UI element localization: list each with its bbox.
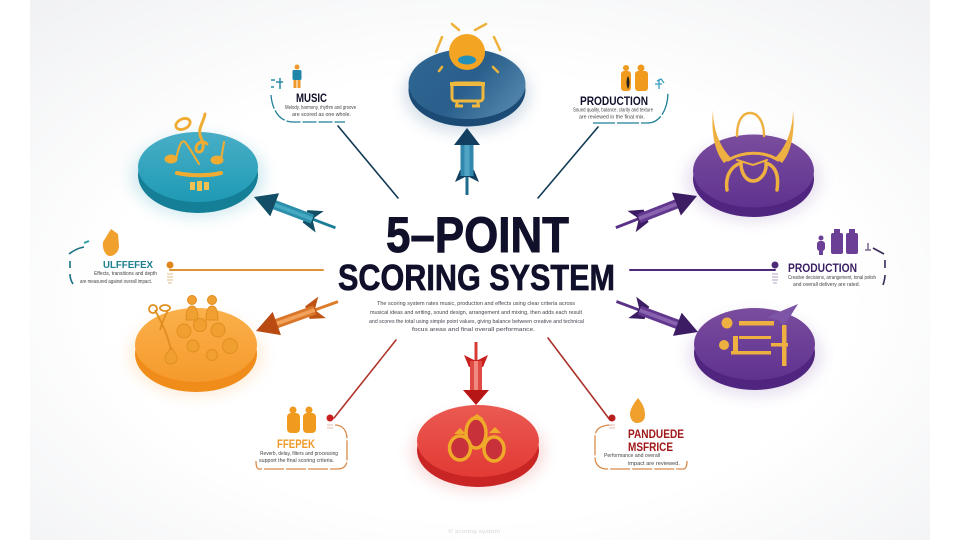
callout: effects left: are measured against overall impact. — [80, 279, 152, 285]
arrow: red down — [463, 342, 489, 405]
disc: blue (top) — [405, 24, 529, 132]
title: 5–POINT — [386, 207, 569, 263]
callout: production right: and overall delivery are rated. — [793, 282, 860, 288]
callout: effects left: ULFFEFEX — [103, 259, 153, 271]
connector lines — [170, 126, 775, 420]
disc: purple (right upper) — [687, 110, 819, 220]
callout: production top: Sound quality, balance, clarity and texture — [573, 108, 653, 114]
callout: pandemic bottom right: Performance and overall — [604, 453, 660, 459]
callout: production top — [573, 64, 668, 123]
callout: production top: PRODUCTION — [580, 94, 648, 108]
marker: red pin — [326, 414, 334, 428]
icon: bars and pointer — [719, 304, 798, 366]
icon: purple figures — [817, 229, 858, 255]
icon: orange tag — [103, 229, 119, 256]
callout: music: are scored as one whole. — [292, 112, 351, 118]
icon: three rings — [450, 414, 504, 461]
icon: person — [271, 64, 302, 89]
callout: production right: Creative decisions, arrangement, tonal polish — [788, 275, 876, 281]
callout: pandemic bottom right: impact are reviewed. — [628, 461, 680, 467]
marker: orange pin — [166, 262, 174, 283]
description text: focus areas and final overall performance. — [412, 327, 536, 333]
callout: production right: PRODUCTION — [788, 261, 857, 275]
arrow: purple lower — [612, 290, 702, 344]
icon: orange drop — [630, 398, 645, 423]
description text: The scoring system rates music, production and effects using clear criteria across — [377, 301, 575, 307]
disc: teal (left upper) — [132, 114, 264, 216]
marker: red pin — [608, 414, 616, 428]
description text: and scores the total using simple point values, giving balance between creative and technical — [369, 319, 584, 325]
callout: effects bottom: FFEPEK — [277, 437, 315, 451]
disc: purple (right lower) — [689, 304, 821, 395]
arrow: orange — [252, 290, 342, 343]
icon: two figures — [621, 64, 664, 91]
callout: production top: are reviewed in the final mix. — [579, 114, 645, 120]
arrow: teal left — [250, 185, 340, 239]
callout: effects bottom: Reverb, delay, filters and processing — [260, 451, 338, 457]
arrow: purple upper — [611, 184, 701, 239]
title: SCORING SYSTEM — [338, 257, 615, 298]
callout: effects bottom — [256, 406, 347, 469]
icon: orange bottles — [287, 406, 316, 433]
callout: pandemic bottom right — [595, 398, 687, 469]
icon: music notes — [164, 114, 224, 191]
callout: production right — [772, 229, 885, 288]
disc: orange (left lower) — [130, 296, 262, 395]
description text: musical ideas and writing, sound design, arrangement and mixing, then adds each result — [370, 310, 582, 316]
icon: figures and rosettes — [149, 296, 238, 364]
description text — [369, 301, 584, 333]
disc: red (bottom) — [412, 405, 544, 490]
callout: music: MUSIC — [296, 91, 327, 105]
callout: effects left — [69, 229, 174, 285]
icon: horned arches — [712, 110, 794, 190]
footer note: © scoring system — [448, 528, 500, 535]
arrow: blue up — [454, 128, 480, 195]
callout: pandemic bottom right: MSFRICE — [628, 442, 673, 454]
callout: music — [271, 64, 356, 122]
callout: music: Melody, harmony, rhythm and groove — [285, 105, 356, 111]
callout: effects left: Effects, transitions and depth — [94, 271, 157, 277]
title — [338, 207, 615, 298]
callout: effects bottom: support the final scoring criteria. — [259, 458, 334, 464]
marker: purple pin — [772, 262, 778, 283]
callout: pandemic bottom right: PANDUEDE — [628, 429, 684, 441]
icon: sun and frame — [436, 24, 500, 106]
